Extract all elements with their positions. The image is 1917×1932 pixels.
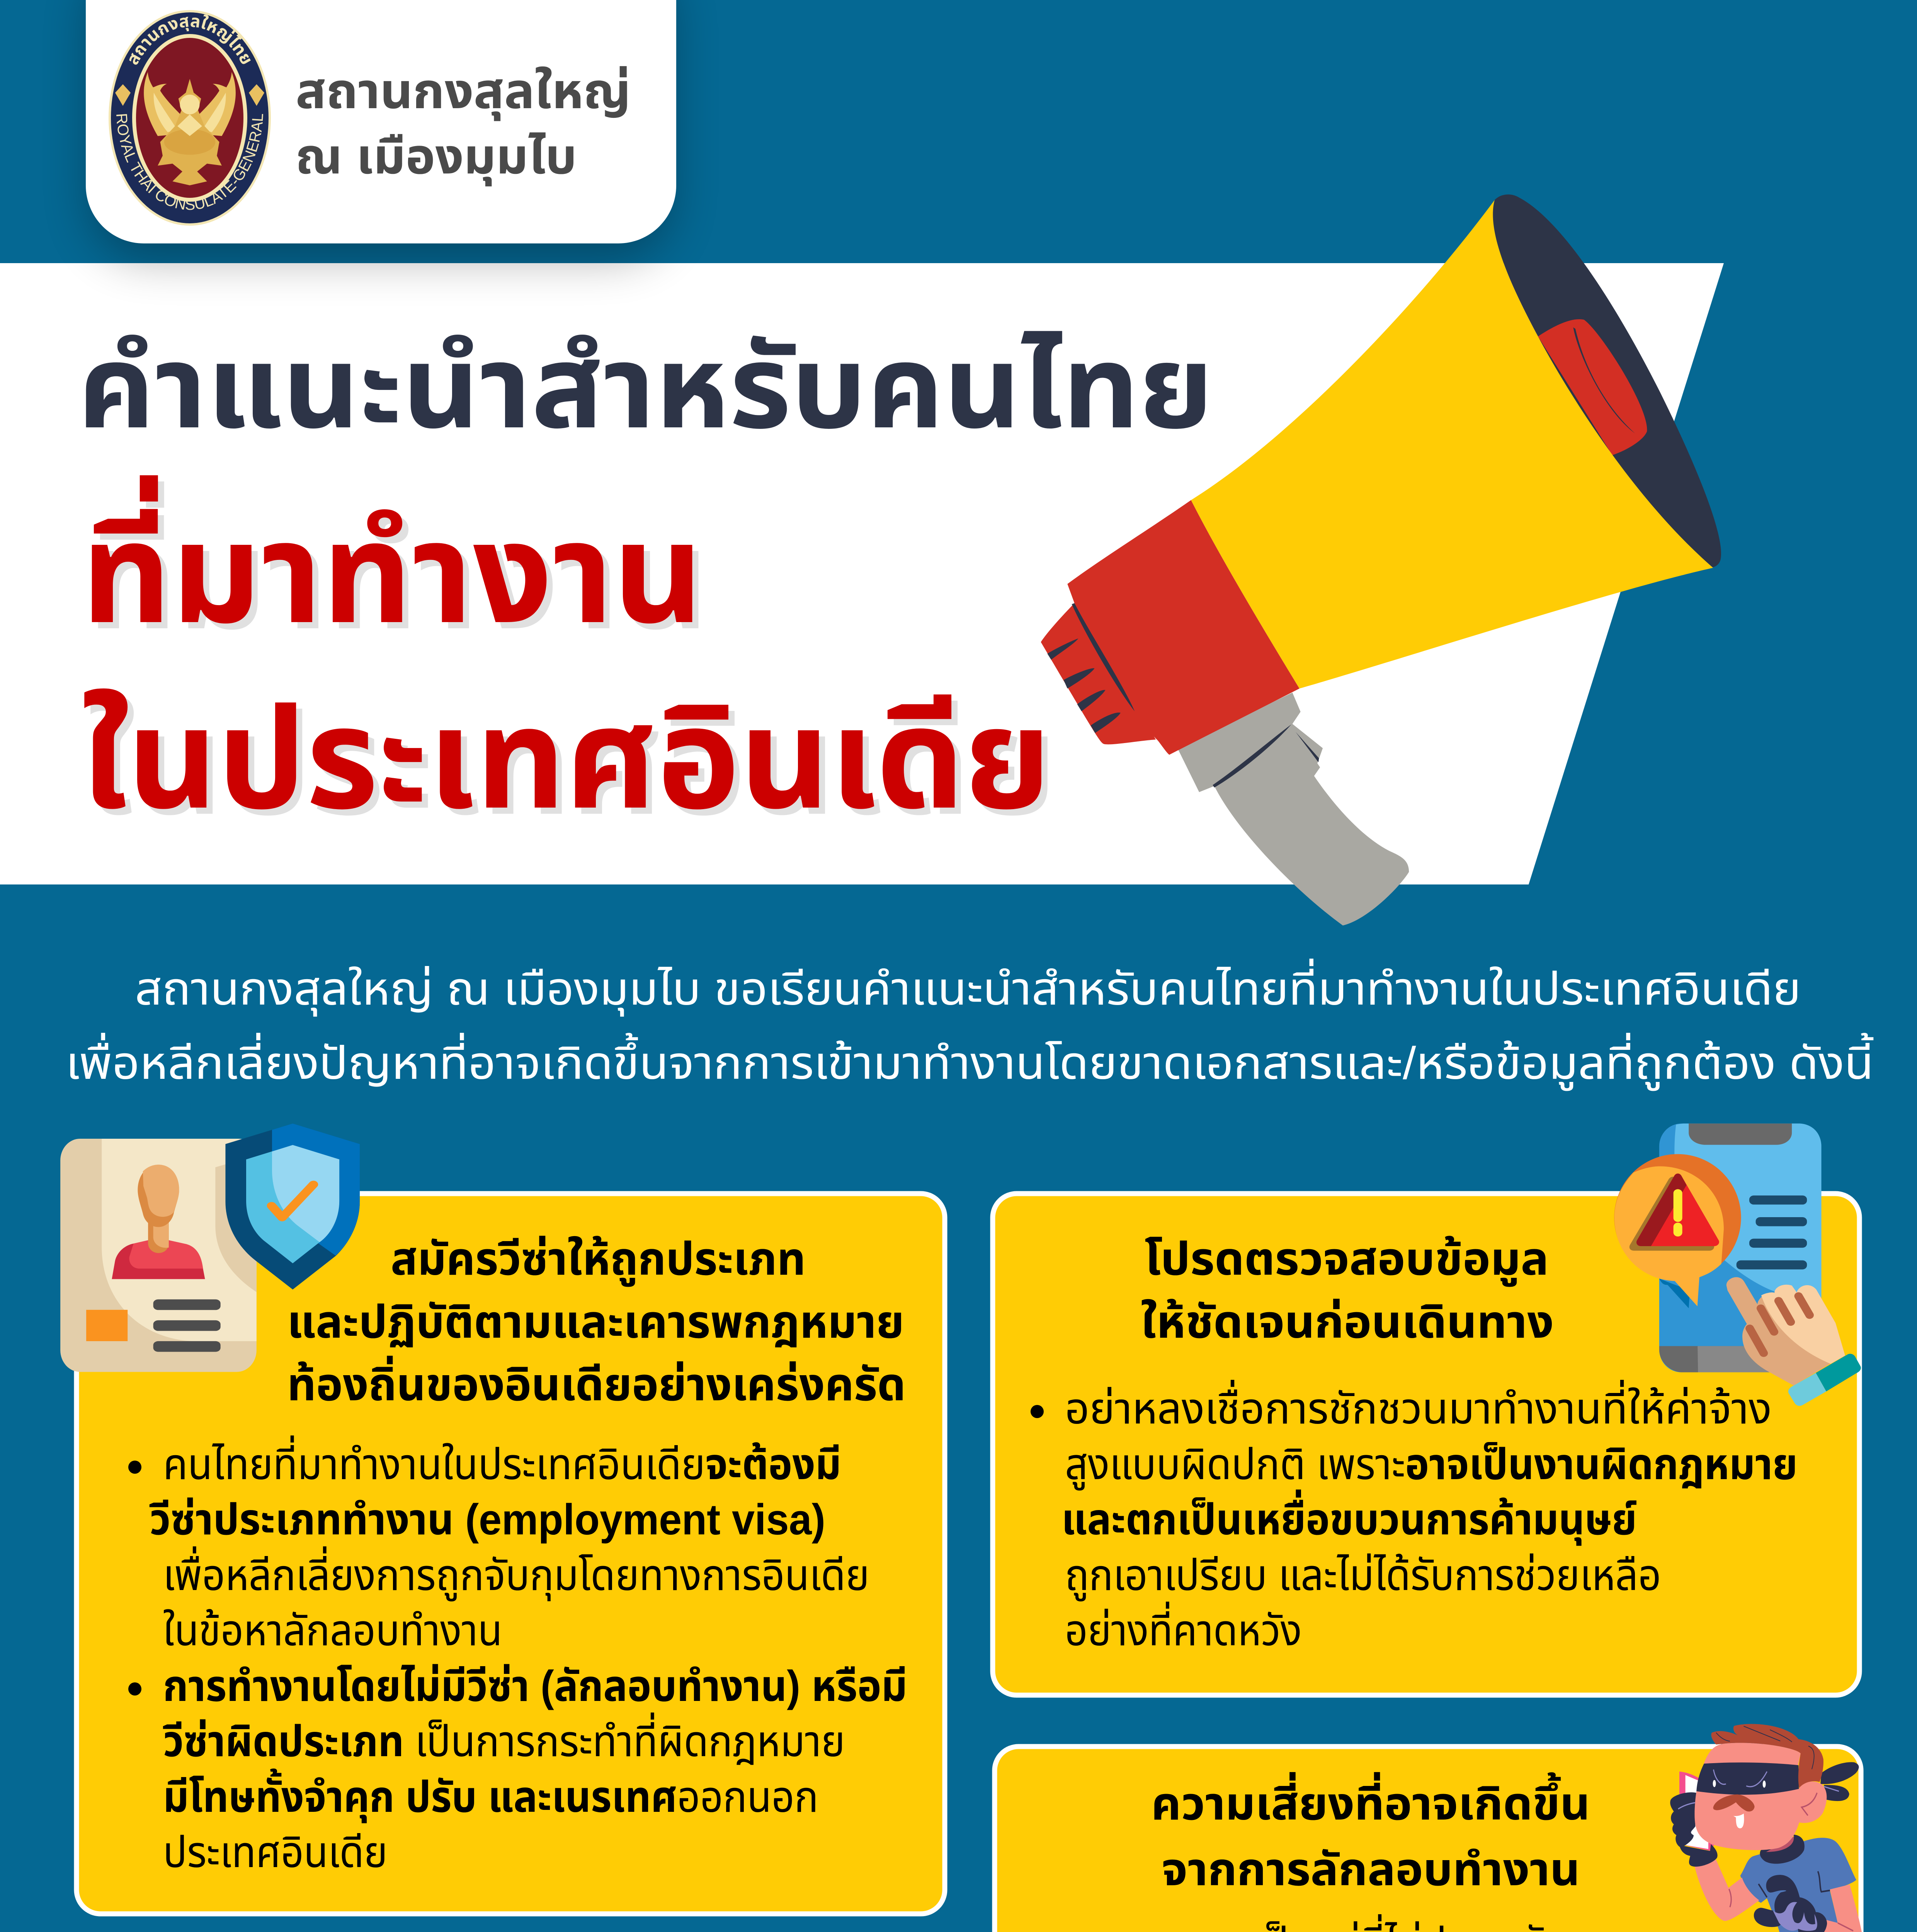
icon: shield with check	[225, 1124, 360, 1289]
heading: visa: สมัครวีซ่าให้ถูกประเภท	[391, 1234, 806, 1287]
title red lines	[81, 474, 1051, 838]
bullet list: check information: ถูกเอาเปรียบ และไม่ได้รับการช่วยเหลือ	[1065, 1551, 1661, 1602]
icon: id card	[60, 1139, 257, 1372]
bullet list: visa: วีซ่าผิดประเภท เป็นการกระทำที่ผิดกฎหมาย	[163, 1712, 845, 1765]
bullet list: visa: เพื่อหลีกเลี่ยงการถูกจับกุมโดยทางการอินเดีย	[163, 1546, 869, 1602]
heading: check information	[1141, 1234, 1554, 1348]
bullet list: visa: การทำงานโดยไม่มีวีซ่า (ลักลอบทำงาน) หรือมี	[163, 1662, 907, 1710]
bullet list: check information: สูงแบบผิดปกติ เพราะอาจเป็นงานผิดกฎหมาย	[1065, 1440, 1798, 1491]
intro text: เพื่อหลีกเลี่ยงปัญหาที่อาจเกิดขึ้นจากการเข้ามาทำงานโดยขาดเอกสารและ/หรือข้อมูลที่ถูกต้อง ดังนี้	[66, 1032, 1874, 1091]
consulate name: สถานกงสุลใหญ่	[296, 64, 631, 121]
bullet list: visa: ประเทศอินเดีย	[163, 1828, 388, 1876]
consulate name: ณ เมืองมุมไบ	[296, 129, 577, 186]
title line 1: คำแนะนำสำหรับคนไทย	[78, 322, 1213, 452]
heading: risks	[1151, 1772, 1590, 1895]
heading: visa: ท้องถิ่นของอินเดียอย่างเคร่งครัด	[287, 1355, 906, 1410]
white title banner	[0, 263, 1724, 884]
bullet list: check information: อย่างที่คาดหวัง	[1065, 1601, 1302, 1655]
heading: risks: ความเสี่ยงที่อาจเกิดขึ้น	[1151, 1772, 1590, 1830]
bullet list: visa: คนไทยที่มาทำงานในประเทศอินเดียจะต้องมี	[163, 1435, 841, 1488]
panel: visa rules	[60, 1124, 945, 1914]
heading: check information: โปรดตรวจสอบข้อมูล	[1145, 1234, 1549, 1287]
logo seal	[109, 10, 271, 226]
bullet list: visa: มีโทษทั้งจำคุก ปรับ และเนรเทศออกนอก	[163, 1768, 818, 1823]
intro text: สถานกงสุลใหญ่ ณ เมืองมุมไบ ขอเรียนคำแนะนำสำหรับคนไทยที่มาทำงานในประเทศอินเดีย	[135, 958, 1801, 1017]
heading: visa: และปฏิบัติตามและเคารพกฎหมาย	[287, 1297, 904, 1348]
bullet list: visa: ในข้อหาลักลอบทำงาน	[163, 1606, 502, 1655]
icon: phone with warning	[1614, 1124, 1861, 1406]
bullet list: visa: วีซ่าประเภททำงาน (employment visa)	[149, 1495, 825, 1544]
title red lines: ที่มาทำงาน	[81, 474, 703, 652]
title	[78, 322, 1213, 838]
bullet list: check information	[1031, 1379, 1798, 1655]
icon: masked thief	[1670, 1724, 1866, 1932]
bullet list: visa	[128, 1435, 907, 1876]
intro text	[66, 958, 1874, 1091]
logo seal: ROYAL THAI CONSULATE-GENERAL	[113, 112, 267, 213]
panel: check information	[993, 1124, 1861, 1695]
logo card	[86, 0, 676, 243]
heading: visa	[287, 1234, 906, 1410]
bullet list: check information: อย่าหลงเชื่อการชักชวนมาทำงานที่ให้ค่าจ้าง	[1065, 1379, 1772, 1433]
logo card shadow	[89, 0, 672, 259]
panel: risks	[995, 1724, 1866, 1932]
heading: risks: จากการลักลอบทำงาน	[1162, 1844, 1580, 1895]
heading: check information: ให้ชัดเจนก่อนเดินทาง	[1141, 1297, 1554, 1348]
garuda emblem	[144, 72, 236, 185]
bullet list: check information: และตกเป็นเหยื่อขบวนการค้ามนุษย์	[1061, 1489, 1637, 1546]
title red lines: ในประเทศอินเดีย	[81, 680, 1051, 838]
icon: megaphone	[1041, 194, 1721, 925]
logo seal: สถานกงสุลใหญ่ไทย	[123, 12, 256, 68]
consulate name	[296, 64, 631, 186]
